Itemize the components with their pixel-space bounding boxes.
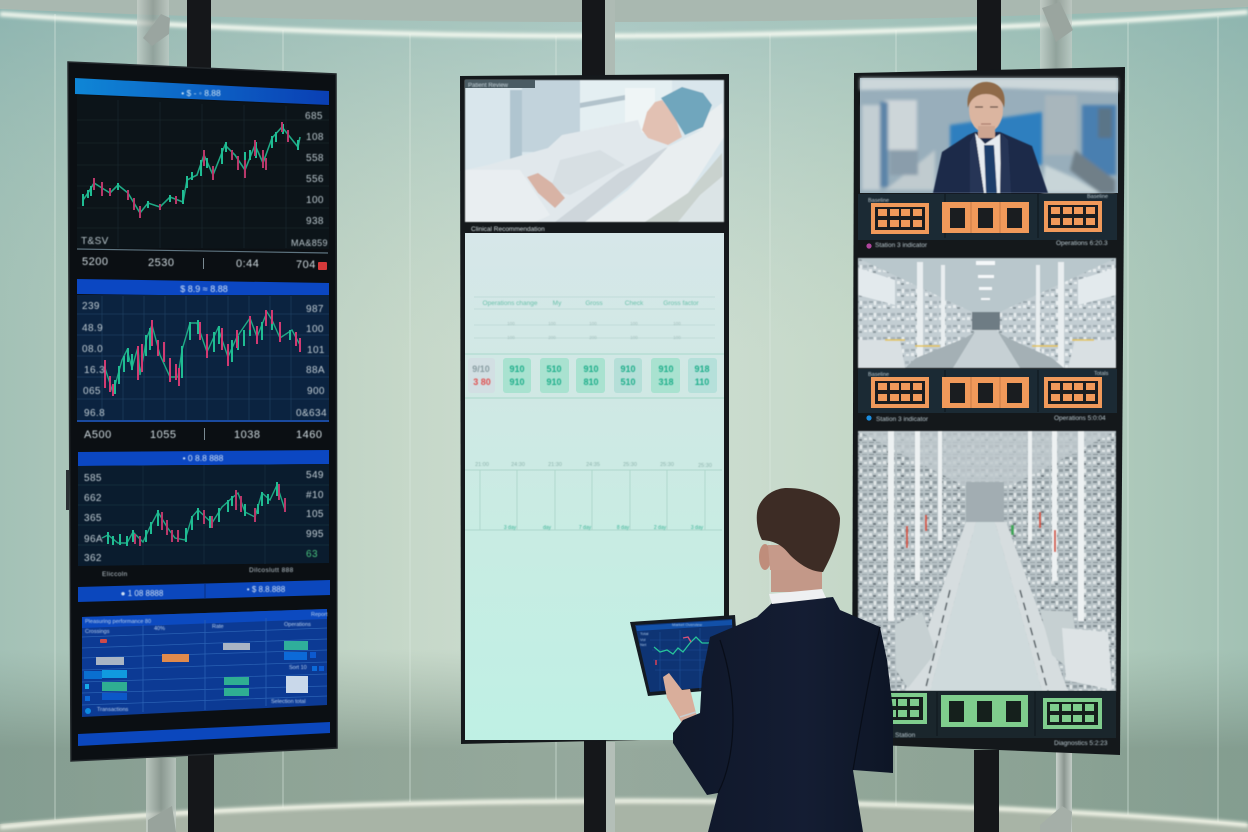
photo: man in suit in front of control room [860,78,1118,193]
empty bar chart grid: 24:30 [511,462,525,468]
data table with coloured status blocks: Rate [212,624,224,630]
empty bar chart grid [465,462,722,531]
data table with coloured status blocks: Report [311,612,328,618]
axis labels: market three: 96A [84,534,103,545]
vitals metric cards: 910 [620,364,636,374]
vitals table: 200 [589,335,597,340]
section caption: Clinical Recommendation [471,226,545,233]
vitals metric cards: 918 [694,364,710,374]
axis labels: market two: 100 [306,324,324,335]
header bar: market three [78,450,329,466]
empty bar chart grid: 24:35 [586,462,600,468]
axis labels: market two [82,301,327,419]
control row: orange status panels one: Baseline [868,198,889,204]
photo caption tag [465,80,535,89]
vitals table [474,297,715,340]
data table with coloured status blocks: Operations [284,622,311,628]
data table with coloured status blocks [82,609,328,717]
axis labels: market three: 362 [84,553,102,564]
mounting poles and brackets [137,0,1073,832]
axis labels: market two: 88A [306,365,325,376]
header bar: market one: • $ - ◦ 8.88 [181,88,221,98]
panel: right factory display [852,67,1125,755]
stats row: market one [77,249,328,271]
axis labels: market one: 108 [306,132,324,143]
header bar: market one [75,78,329,105]
axis labels: market three: 995 [306,529,324,540]
axis labels: market two: 0&634 [296,408,327,419]
empty bar chart grid: 8 day [617,525,630,531]
axis labels: market one: 556 [306,174,324,185]
header bar: market two [77,279,329,297]
tablet with market chart: Net [640,642,647,647]
chart: market two candlesticks [77,295,329,420]
axis labels: market three: 365 [84,513,102,524]
axis labels: market one: 685 [305,111,323,122]
stats row: market two [77,421,329,441]
vitals table: Operations change [483,300,538,307]
dark suit jacket [673,597,893,832]
control row: orange status panels one [858,194,1117,249]
vitals metric cards: 910 [583,364,599,374]
control row: orange status panels two [858,369,1117,423]
vitals table: Gross [585,300,603,307]
tablet with market chart: Total [640,631,649,636]
data table with coloured status blocks: 40% [154,626,165,632]
vitals metric cards: 910 [658,364,674,374]
axis labels: market two: 48.9 [82,323,103,334]
hand holding tablet [663,673,697,723]
vitals metric cards: 3 80 [473,377,491,387]
vitals dashboard panel [465,233,724,740]
footer bar [78,722,330,746]
vitals table: My [553,300,562,307]
vitals table: 200 [548,335,556,340]
short dark hair [757,488,840,572]
axis labels: market one [81,111,328,248]
stats row: market two: A500 [84,429,112,441]
vitals metric cards: 810 [583,377,599,387]
control row: green status panels: Diagnostics 5:2:23 [1054,740,1108,747]
control row: orange status panels one: Station 3 indicator [875,242,928,249]
axis labels: market two: 96.8 [84,408,105,419]
vitals metric cards [465,354,724,398]
vitals table: Check [625,300,644,307]
tablet with market chart [630,615,737,696]
axis labels: market two: 987 [306,304,324,315]
header bar: market three: • 0 8.8 888 [183,453,224,463]
photo: factory hall aisle two [858,431,1116,691]
axis labels: market three [84,470,324,578]
tablet with market chart: Vol [640,637,646,642]
control row: orange status panels two: Baseline [868,372,889,378]
vitals table: 100 [507,321,515,326]
control row: orange status panels one: Baseline [1087,194,1108,200]
tab bar: two blue tabs [78,580,330,602]
vitals table: 100 [673,321,681,326]
vitals metric cards: 910 [509,377,525,387]
stats row: market one: 704 [296,259,316,271]
axis labels: market three: 662 [84,493,102,504]
stats row: market one: 0:44 [236,258,259,270]
axis labels: market two: 16.3 [84,365,105,376]
chart: market one candlesticks [77,95,329,249]
empty bar chart grid: 25:30 [698,463,712,469]
vitals table: 100 [548,321,556,326]
vitals table: 100 [507,335,515,340]
tablet with market chart: Market Overview [672,622,702,627]
axis labels: market two: 239 [82,301,100,312]
axis labels: market one: 938 [306,216,324,227]
control row: orange status panels two: Station 3 indicator [876,416,929,423]
tab bar: two blue tabs: ● 1 08 8888 [121,589,164,598]
control row: orange status panels two: Totals [1094,371,1109,377]
empty bar chart grid: day [543,525,552,531]
man in suit [933,82,1048,193]
vitals metric cards: 910 [509,364,525,374]
axis labels: market one: T&SV [81,236,109,247]
stats row: market two: 1055 [150,429,176,441]
axis labels: market two: 101 [307,345,325,356]
head and ear [759,544,820,570]
vitals metric cards: 510 [546,364,562,374]
empty bar chart grid: 21:30 [548,462,562,468]
panel: left trading display [66,62,337,761]
vitals table: 100 [673,335,681,340]
stats row: market two: 1460 [296,429,322,441]
empty bar chart grid: 25:30 [623,462,637,468]
person seen from behind holding tablet [663,488,893,832]
empty bar chart grid: 7 day [579,525,592,531]
data table with coloured status blocks: Crossings [85,629,110,635]
photo caption tag: Patient Review [468,83,509,89]
axis labels: market three: 63 [306,549,318,560]
axis labels: market one: MA&859 [291,238,328,248]
control row: green status panels: Station [895,732,916,739]
panel: centre patient display [460,74,729,744]
vitals metric cards: 510 [620,377,636,387]
axis labels: market one: 558 [306,153,324,164]
vitals table: Gross factor [663,300,700,307]
control row: green status panels [858,691,1116,747]
vitals metric cards: 318 [658,377,674,387]
vitals table: 100 [589,321,597,326]
axis labels: market two: 08.0 [82,344,103,355]
vitals metric cards: 110 [695,377,709,387]
photo: patient resting in hospital bed [465,80,724,222]
axis labels: market three: 585 [84,473,102,484]
empty bar chart grid: 21:00 [475,462,489,468]
data table with coloured status blocks: Sort 10 [289,665,307,671]
control row: orange status panels two: Operations 5:0:04 [1054,415,1106,422]
empty bar chart grid: 3 day [504,525,517,531]
data table with coloured status blocks: Pleasuring performance 80 [85,619,151,625]
axis labels: market one: 100 [306,195,324,206]
data table with coloured status blocks: Transactions [97,707,129,713]
empty bar chart grid: 3 day [691,525,704,531]
axis labels: market two: 065 [83,386,101,397]
stats row: market two: 1038 [234,429,260,441]
stats row: market one: 5200 [82,256,108,268]
vitals table: 100 [630,321,638,326]
stats row: market one: 2530 [148,257,174,269]
axis labels: market three: Eliccoln [102,571,128,578]
axis labels: market three: Dilcoslutt 888 [249,567,294,574]
data table with coloured status blocks: Selection total [271,699,306,705]
control row: orange status panels one: Operations 6:20.3 [1056,240,1108,247]
vitals metric cards: 9/10 [472,364,490,374]
empty bar chart grid: 25:30 [660,462,674,468]
chart: market three candlesticks [78,464,329,566]
vitals metric cards: 910 [546,377,562,387]
axis labels: market three: 105 [306,509,324,520]
tab bar: two blue tabs: • $ 8.8.888 [247,585,286,594]
empty bar chart grid: 2 day [654,525,667,531]
photo: factory hall aisle one [858,258,1116,368]
header bar: market two: $ 8.9 ≈ 8.88 [180,284,228,294]
jacket seams [718,627,880,793]
axis labels: market three: 549 [306,470,324,481]
shirt collar and neck [769,560,826,604]
vitals table: 100 [630,335,638,340]
axis labels: market three: #10 [306,490,324,501]
axis labels: market two: 900 [307,386,325,397]
